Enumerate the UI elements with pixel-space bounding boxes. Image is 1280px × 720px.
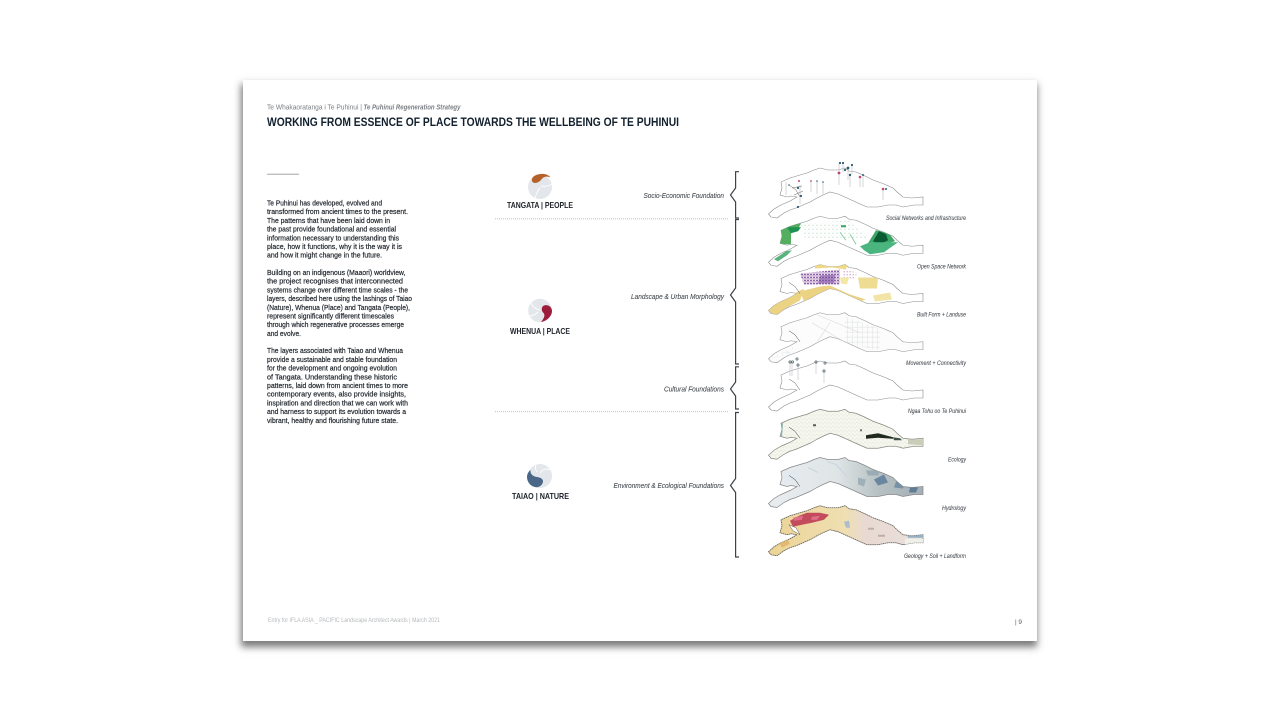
label: open space network: Open Space Network bbox=[917, 264, 967, 270]
label: Taiao Nature: TAIAO | NATURE bbox=[512, 491, 569, 501]
breadcrumb subtitle: Te Puhinui Regeneration Strategy bbox=[364, 102, 461, 112]
paragraph 2: represent significantly different timescales bbox=[267, 312, 394, 320]
brace: landscape and urban morphology bbox=[730, 220, 739, 364]
icon: Tangata koru bbox=[528, 174, 552, 199]
page sheet bbox=[243, 80, 1037, 641]
label: Tangata People: TANGATA | PEOPLE bbox=[507, 200, 573, 210]
paragraph 1: the past provide foundational and essential bbox=[267, 225, 396, 234]
paragraph 3: of Tangata. Understanding these historic bbox=[267, 372, 397, 381]
map: nga tohu bbox=[768, 358, 923, 411]
short rule bbox=[267, 173, 299, 176]
page number: | 9 bbox=[1015, 619, 1022, 626]
label: cultural foundations: Cultural Foundations bbox=[664, 384, 724, 394]
breadcrumb subtitle bbox=[267, 102, 461, 112]
paragraph 2: Building on an indigenous (Maaori) worldview, bbox=[267, 268, 406, 277]
dotted divider: people and place bbox=[495, 218, 728, 220]
paragraph 2: through which regenerative processes emerge bbox=[267, 320, 404, 329]
label: nga tohu o te puhinui: Ngaa Tohu oo Te Puhinui bbox=[908, 408, 966, 415]
paragraph 2: and evolve. bbox=[267, 329, 301, 338]
map: geology soil landform bbox=[768, 506, 923, 556]
map: movement and connectivity bbox=[768, 313, 923, 363]
paragraph 3: inspiration and direction that we can work with bbox=[267, 398, 408, 407]
paragraph 3: and harness to support its evolution towards a bbox=[267, 407, 407, 416]
dotted divider: place and nature bbox=[495, 411, 728, 413]
paragraph 2: systems change over different time scales - the bbox=[267, 285, 408, 294]
paragraph 3 bbox=[267, 346, 408, 425]
paragraph 1: information necessary to understanding this bbox=[267, 233, 399, 242]
icon: Taiao koru bbox=[527, 464, 552, 488]
map: built form and landuse bbox=[768, 262, 923, 316]
paragraph 1: transformed from ancient times to the present. bbox=[267, 207, 408, 216]
paragraph 3: contemporary events, also provide insights, bbox=[267, 390, 406, 399]
paragraph 1: and how it might change in the future. bbox=[267, 251, 382, 260]
paragraph 3: The layers associated with Taiao and Whenua bbox=[267, 346, 404, 355]
brace: cultural bbox=[730, 367, 739, 409]
paragraph 1 bbox=[267, 198, 408, 260]
label: movement and connectivity: Movement + Connectivity bbox=[906, 360, 967, 367]
label: built form and landuse: Built Form + Landuse bbox=[917, 312, 966, 318]
label: landscape and urban morphology: Landscape & Urban Morphology bbox=[631, 292, 724, 301]
paragraph 3: vibrant, healthy and flourishing future state. bbox=[267, 416, 398, 425]
brace: socio-economic bbox=[730, 172, 739, 218]
label: hydrology: Hydrology bbox=[942, 505, 967, 512]
label: environment and ecological foundations: Environment & Ecological Foundations bbox=[614, 481, 724, 490]
map: social networks bbox=[768, 162, 923, 218]
footer note: Entry for IFLA ASIA _ PACIFIC Landscape Architect Awards | March 2021 bbox=[268, 617, 440, 624]
icon: Whenua koru bbox=[528, 299, 552, 322]
paragraph 3: provide a sustainable and stable foundation bbox=[267, 355, 397, 364]
brace: environment and ecological bbox=[730, 412, 739, 557]
map: ecology bbox=[768, 409, 923, 459]
paragraph 1: The patterns that have been laid down in bbox=[267, 216, 390, 225]
breadcrumb subtitle: Te Whakaoratanga i Te Puhinui | bbox=[267, 102, 362, 112]
label: geology soil landform: Geology + Soil + Landform bbox=[904, 553, 966, 560]
paragraph 3: for the development and ongoing evolution bbox=[267, 364, 397, 373]
label: socio-economic foundation: Socio-Economic Foundation bbox=[644, 191, 724, 200]
text block: introduction bbox=[267, 198, 412, 425]
paragraph 2: (Nature), Whenua (Place) and Tangata (People), bbox=[267, 303, 410, 312]
paragraph 1: Te Puhinui has developed, evolved and bbox=[267, 198, 382, 208]
label: social networks and infrastructure: Social Networks and Infrastructure bbox=[886, 215, 966, 222]
paragraph 2 bbox=[267, 268, 412, 338]
label: ecology: Ecology bbox=[948, 456, 967, 464]
label: Whenua Place: WHENUA | PLACE bbox=[510, 326, 570, 336]
paragraph 2: the project recognises that interconnected bbox=[267, 277, 403, 286]
map: hydrology bbox=[768, 458, 923, 508]
map: open space network bbox=[768, 216, 923, 266]
paragraph 2: layers, described here using the lashings of Taiao bbox=[267, 294, 412, 303]
paragraph 3: patterns, laid down from ancient times to more bbox=[267, 381, 408, 390]
paragraph 1: place, how it functions, why it is the way it is bbox=[267, 242, 402, 251]
title: WORKING FROM ESSENCE OF PLACE TOWARDS THE WELLBEING OF TE PUHINUI bbox=[267, 115, 679, 129]
